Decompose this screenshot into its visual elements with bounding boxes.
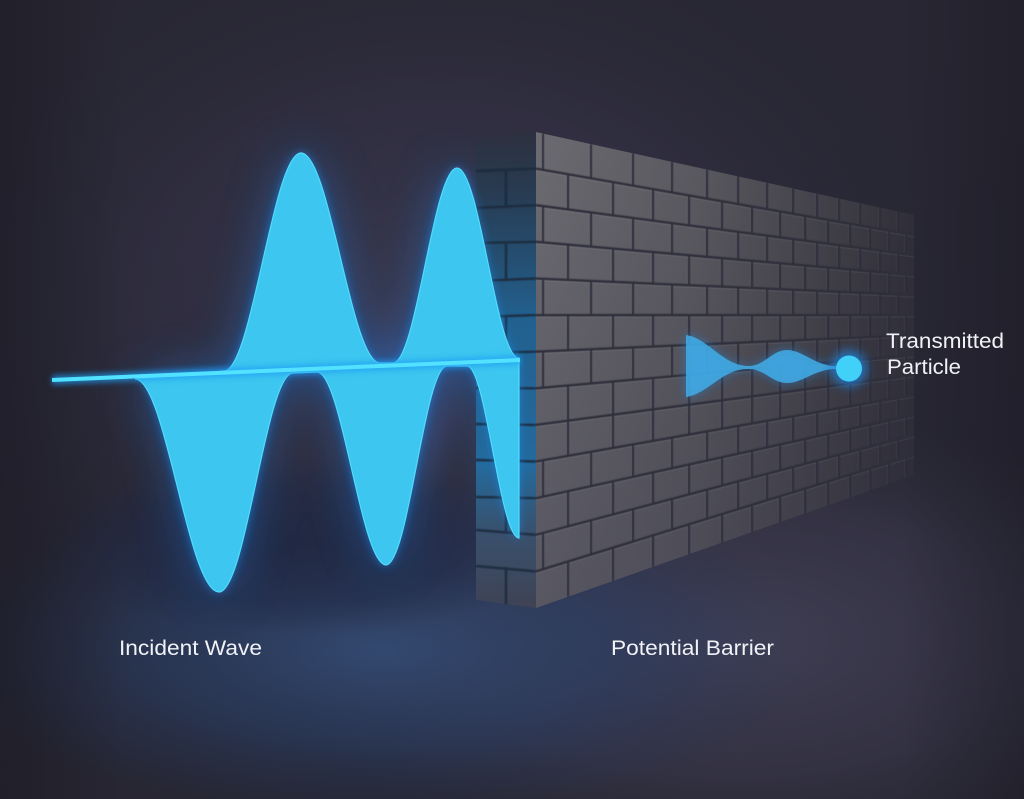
icon: transmitted wave and particle — [686, 335, 867, 397]
icon: incident wave — [52, 153, 520, 592]
label: incident wave: Incident Wave — [119, 637, 262, 660]
label: potential barrier: Potential Barrier — [611, 637, 774, 660]
wave baseline — [52, 360, 520, 380]
wall left face — [476, 132, 536, 608]
panel: potential barrier brick wall — [476, 132, 914, 608]
label: transmitted particle — [886, 330, 1004, 379]
wall right face — [536, 132, 914, 608]
wave glow on the background — [135, 153, 519, 592]
transmitted wave — [686, 335, 836, 397]
label: transmitted particle: Particle — [887, 356, 961, 379]
label: transmitted particle: Transmitted — [886, 330, 1004, 353]
particle — [831, 350, 867, 386]
